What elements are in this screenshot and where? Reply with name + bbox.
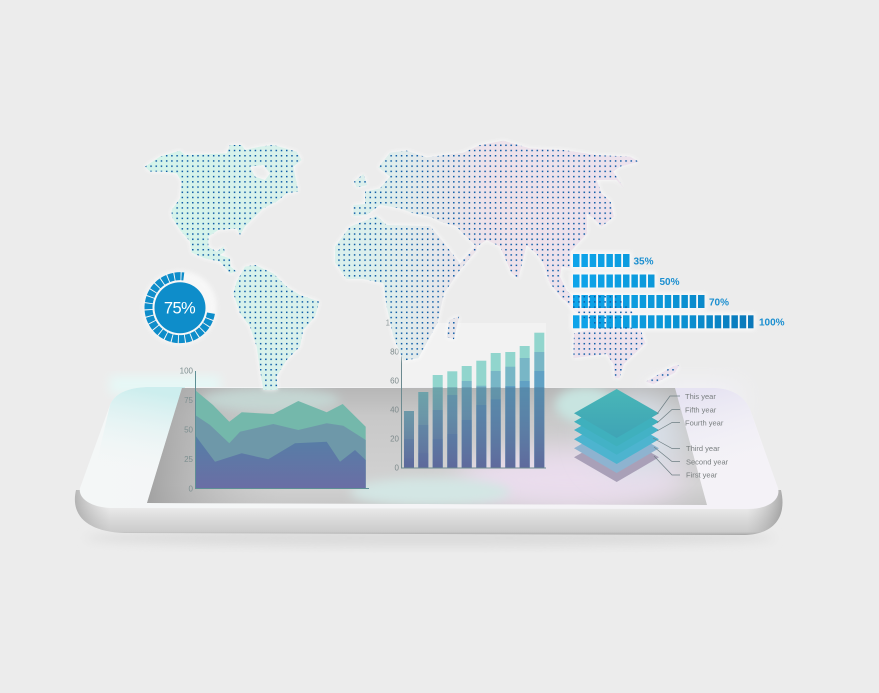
bar percentage labels: 35% <box>634 256 654 268</box>
area chart y labels: 25 <box>184 455 194 464</box>
stack labels: Third year <box>686 444 720 453</box>
bar chart bars <box>404 333 544 468</box>
stack labels: Second year <box>686 458 729 466</box>
bar chart y labels: 40 <box>390 406 400 414</box>
area chart y labels: 100 <box>180 366 194 376</box>
donut glow <box>143 271 217 345</box>
area chart y labels: 0 <box>189 484 194 494</box>
bar row four <box>573 315 754 328</box>
phone shadow and holographic glow <box>85 376 775 547</box>
bar row two <box>573 274 654 288</box>
stack labels: This year <box>685 392 716 401</box>
bar chart <box>386 318 546 472</box>
world map dots <box>145 141 679 390</box>
bar chart y labels: 20 <box>390 434 400 444</box>
stack labels <box>685 392 729 480</box>
glass tint left <box>95 387 185 470</box>
area chart axes <box>196 371 369 488</box>
glass tint right <box>672 388 770 470</box>
bar chart y labels: 60 <box>390 376 400 386</box>
donut value: 75% <box>164 300 196 318</box>
world map glow <box>176 148 624 392</box>
bar chart y labels: 100 <box>386 318 400 328</box>
phone screen <box>147 388 707 505</box>
bar percentage labels <box>634 256 785 328</box>
area chart plot <box>195 390 366 488</box>
donut ring <box>148 276 211 339</box>
bar chart y labels: 0 <box>395 464 400 472</box>
stack leader lines <box>653 396 680 475</box>
segmented percentage bars <box>571 252 785 330</box>
donut centre <box>154 282 206 333</box>
phone body edge <box>75 490 782 535</box>
layered stack chart <box>574 389 729 482</box>
stack labels: First year <box>686 470 718 480</box>
bar percentage labels: 50% <box>660 277 680 288</box>
phone <box>75 376 782 547</box>
world map land tint <box>145 140 679 390</box>
donut progress <box>143 271 217 345</box>
stack labels: Fourth year <box>685 418 724 427</box>
bar chart axes <box>402 323 546 468</box>
phone glass <box>80 387 778 509</box>
stack layers <box>574 389 659 482</box>
bar chart y labels: 80 <box>390 348 400 356</box>
bar row three <box>573 295 704 308</box>
area chart y labels <box>180 366 194 494</box>
bar percentage labels: 100% <box>759 318 785 328</box>
area chart y labels: 75 <box>184 396 194 405</box>
area chart y labels: 50 <box>184 426 194 434</box>
area chart <box>180 366 369 494</box>
bar row one <box>573 254 630 267</box>
bar percentage labels: 70% <box>709 298 729 308</box>
bars glow <box>571 252 755 330</box>
bar chart y labels <box>386 318 400 472</box>
stack labels: Fifth year <box>685 405 717 414</box>
bar chart grid <box>402 323 546 387</box>
screen colour wash <box>200 387 685 512</box>
